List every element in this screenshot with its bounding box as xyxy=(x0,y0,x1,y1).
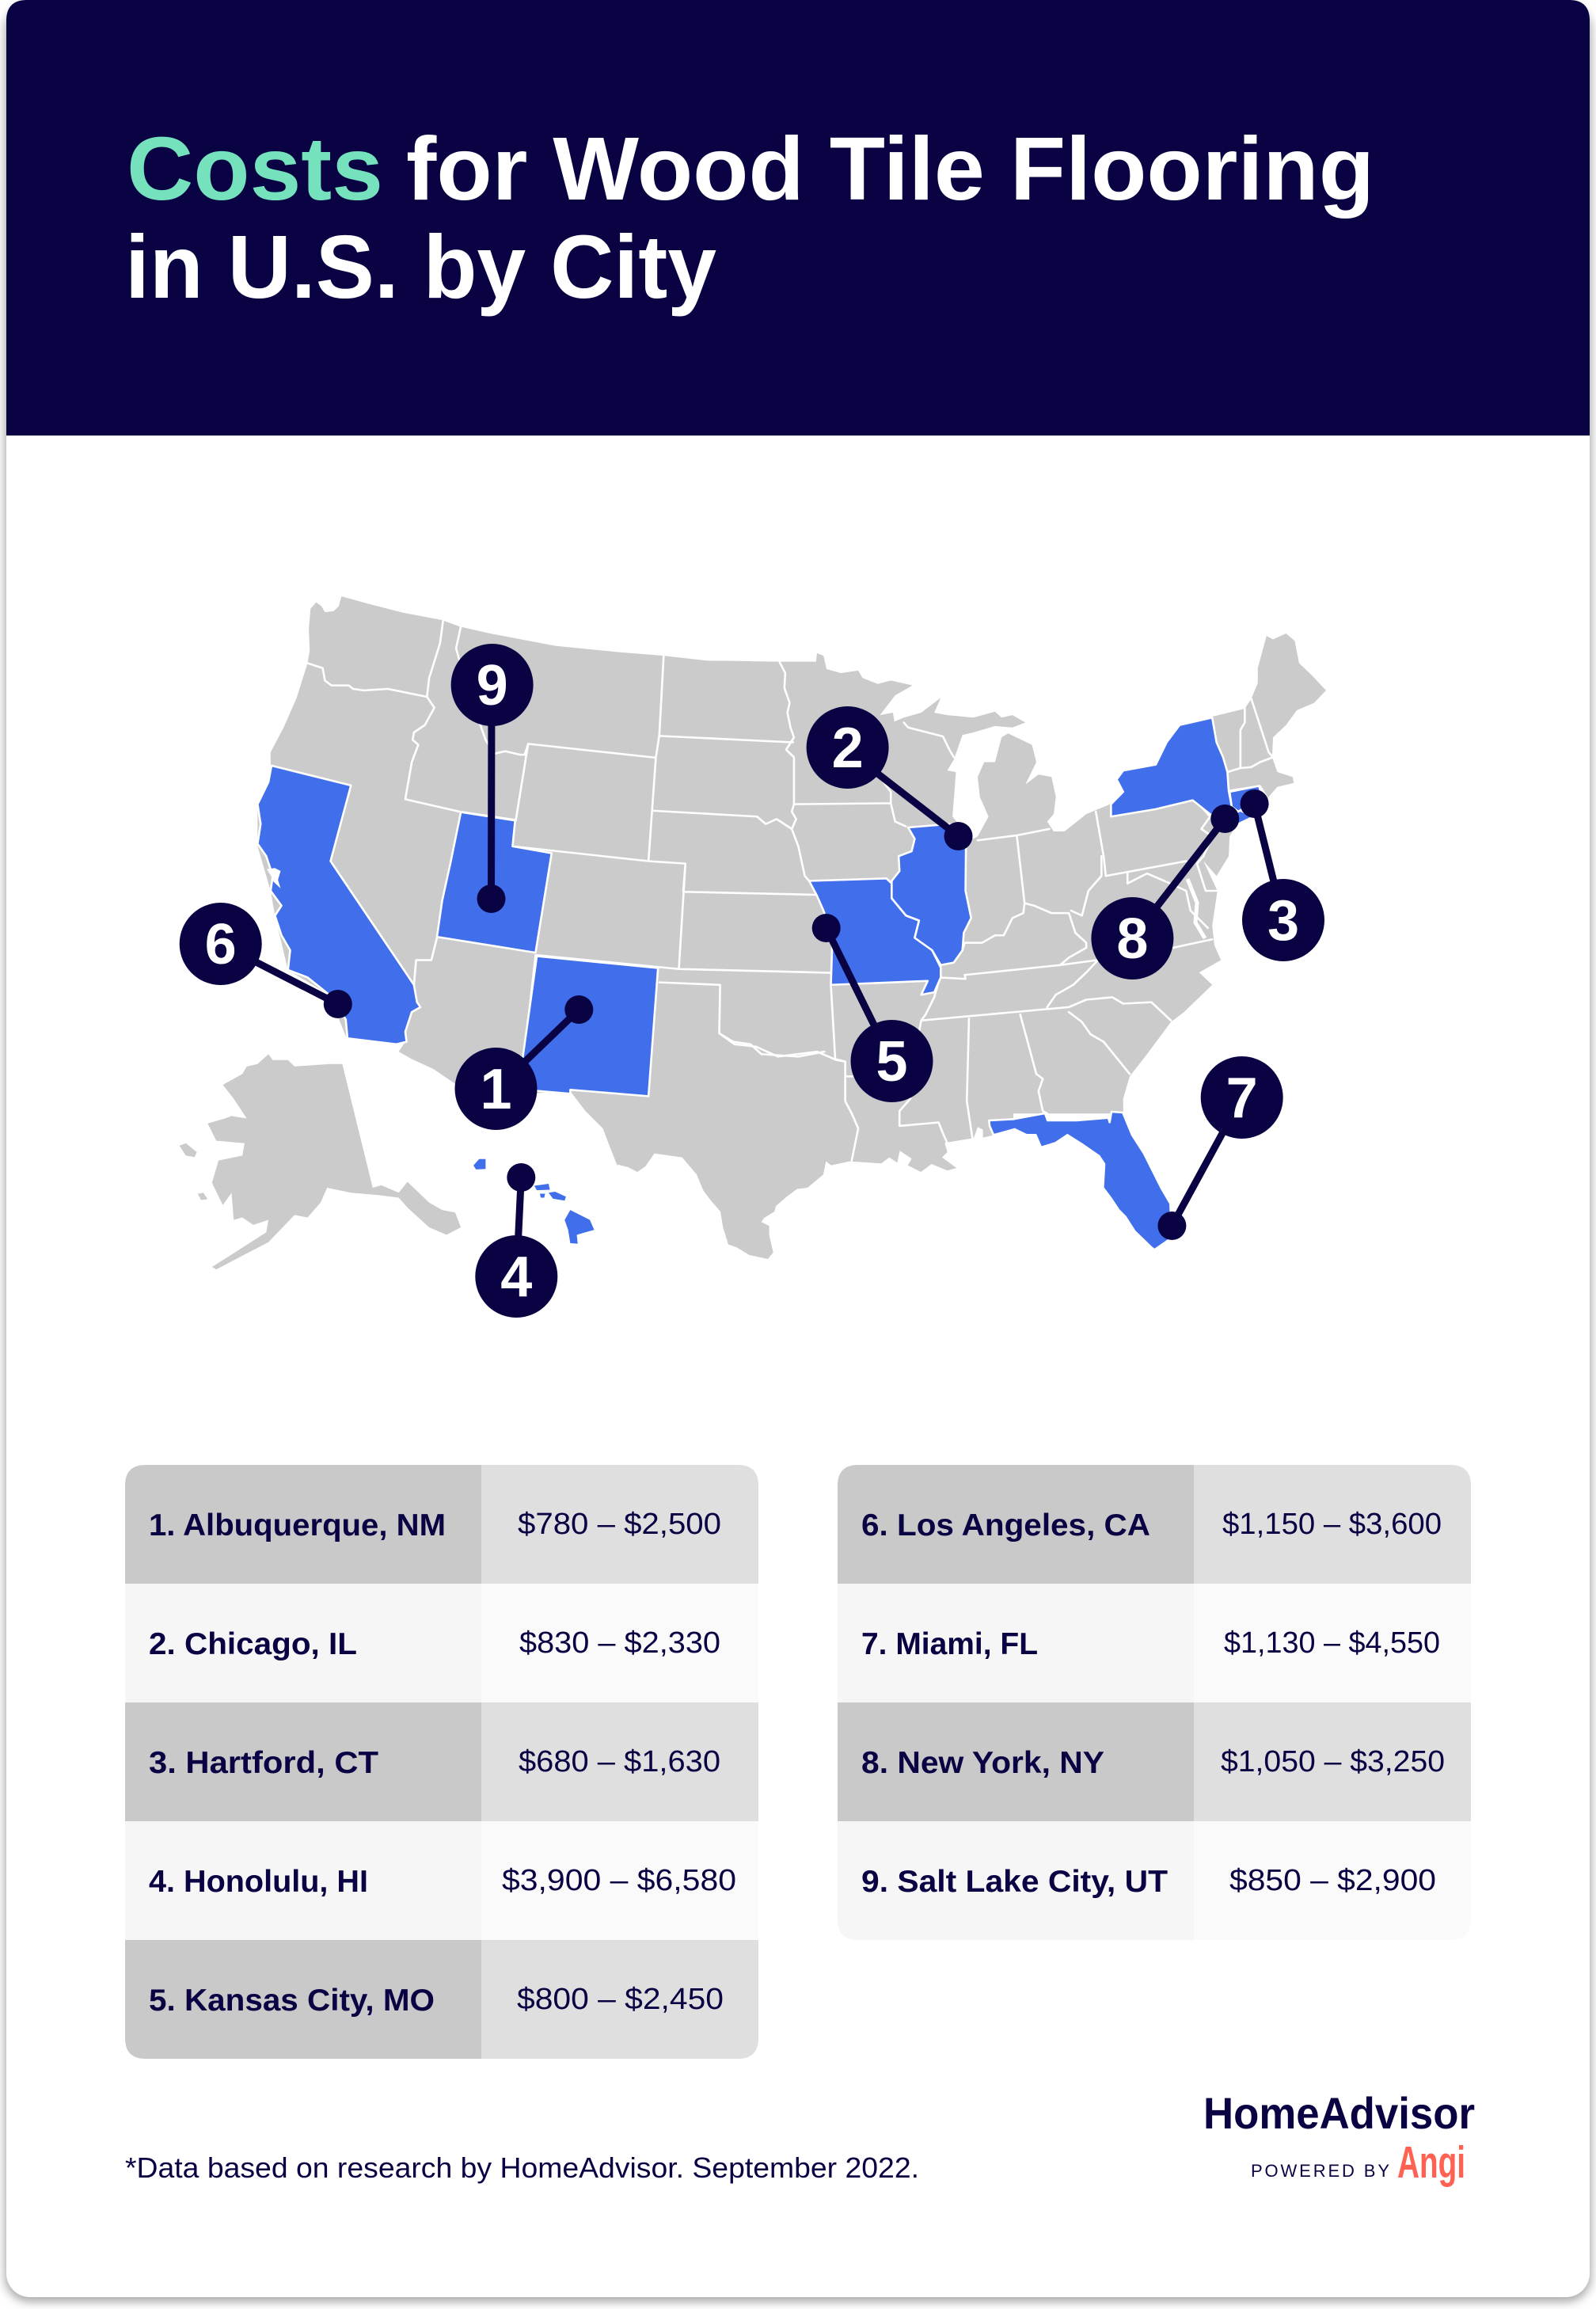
pin 4: Honolulu: 4 xyxy=(500,1246,532,1309)
pin 6: Los Angeles xyxy=(180,903,352,1018)
Illinois xyxy=(891,824,971,965)
pin 1: Albuquerque xyxy=(454,995,593,1130)
right cost table: $1,130 – $4,550 xyxy=(1224,1626,1440,1660)
title: for Wood Tile Flooring xyxy=(406,119,1374,219)
eastern states xyxy=(720,698,1273,1161)
logo: HomeAdvisor powered by Angi: Angi xyxy=(1397,2137,1465,2188)
right cost table: 9. Salt Lake City, UT xyxy=(861,1865,1168,1899)
California xyxy=(257,766,420,1044)
left cost table: $3,900 – $6,580 xyxy=(502,1864,736,1897)
left cost table: $780 – $2,500 xyxy=(518,1508,721,1541)
pin 4: Honolulu xyxy=(475,1163,557,1318)
Utah xyxy=(437,812,552,953)
pin 3: Hartford: 3 xyxy=(1267,889,1299,953)
gulf landmass xyxy=(618,950,1013,1259)
left cost table: $830 – $2,330 xyxy=(519,1626,720,1660)
right cost table xyxy=(838,1465,1471,1940)
western landmass xyxy=(257,596,750,1166)
eastern landmass xyxy=(712,633,1326,1113)
left cost table: 2. Chicago, IL xyxy=(149,1627,357,1661)
pin 5: Kansas City: 5 xyxy=(876,1030,908,1094)
map of the United States xyxy=(180,596,1326,1269)
Chesapeake Bay xyxy=(1188,879,1205,938)
left cost table: 4. Honolulu, HI xyxy=(149,1865,368,1899)
right cost table: 7. Miami, FL xyxy=(861,1627,1038,1661)
pin 8: New York xyxy=(1091,805,1239,980)
Connecticut xyxy=(1229,786,1262,812)
pin 7: Miami: 7 xyxy=(1226,1067,1258,1130)
pin 2: Chicago: 2 xyxy=(832,717,864,780)
left cost table xyxy=(125,1465,758,2059)
header band xyxy=(6,0,1590,436)
right cost table: $850 – $2,900 xyxy=(1229,1864,1436,1897)
left cost table: 5. Kansas City, MO xyxy=(149,1984,435,2018)
Florida xyxy=(989,1112,1172,1250)
left cost table: 1. Albuquerque, NM xyxy=(149,1508,446,1543)
pin 6: Los Angeles: 6 xyxy=(205,913,237,976)
New York xyxy=(1111,717,1253,824)
pin 5: Kansas City xyxy=(812,914,933,1102)
pin 8: New York: 8 xyxy=(1116,907,1148,971)
pin 1: Albuquerque: 1 xyxy=(480,1058,512,1121)
pin 9: Salt Lake City xyxy=(451,644,534,913)
left cost table: $800 – $2,450 xyxy=(517,1983,724,2016)
pin 2: Chicago xyxy=(807,706,972,850)
pin 9: Salt Lake City: 9 xyxy=(477,654,508,717)
Hawaii xyxy=(473,1159,595,1244)
pin 3: Hartford xyxy=(1241,789,1324,961)
San Francisco Bay xyxy=(267,868,280,888)
right cost table: $1,150 – $3,600 xyxy=(1222,1508,1442,1541)
left cost table: 3. Hartford, CT xyxy=(149,1746,378,1780)
western state borders xyxy=(307,621,838,1059)
right cost table: 8. New York, NY xyxy=(861,1746,1104,1780)
pin 7: Miami xyxy=(1157,1056,1283,1240)
right cost table: $1,050 – $3,250 xyxy=(1221,1745,1445,1778)
footnote: *Data based on research by HomeAdvisor. September 2022. xyxy=(125,2151,919,2184)
title: in U.S. by City xyxy=(125,217,716,317)
title xyxy=(125,119,1374,317)
logo: HomeAdvisor powered by Angi: HomeAdvisor xyxy=(1203,2088,1475,2138)
New Mexico xyxy=(522,957,658,1096)
Missouri xyxy=(809,878,940,995)
left cost table: $680 – $1,630 xyxy=(519,1745,720,1778)
title: Costs xyxy=(127,119,383,219)
logo: HomeAdvisor powered by Angi: POWERED BY xyxy=(1251,2161,1389,2181)
Alaska xyxy=(207,1054,461,1269)
eastern state borders xyxy=(720,698,1273,1161)
right cost table: 6. Los Angeles, CA xyxy=(861,1508,1150,1543)
logo: HomeAdvisor powered by Angi xyxy=(1203,2088,1475,2188)
